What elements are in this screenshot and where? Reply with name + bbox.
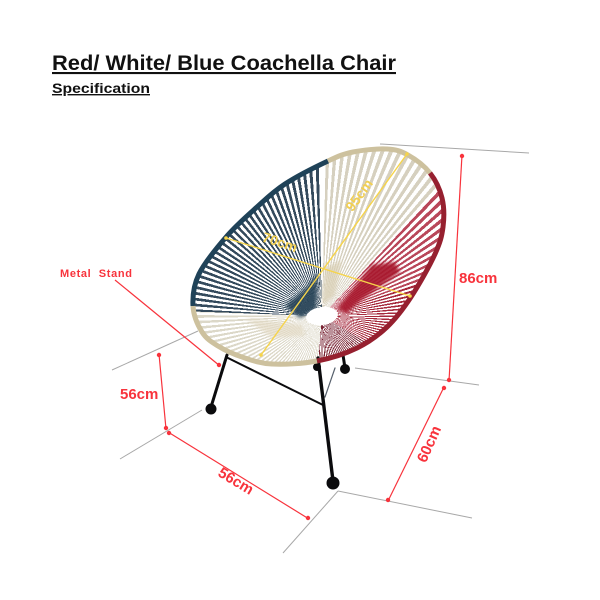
label: 60cm: 60cm bbox=[414, 423, 445, 465]
95cm height line bbox=[261, 154, 407, 355]
arrow: metal stand bbox=[115, 280, 221, 367]
arrow: 86cm bbox=[447, 154, 464, 382]
rim: navy section bbox=[193, 161, 328, 306]
arrow: 60cm bbox=[386, 386, 446, 502]
label: metal stand: Metal Stand bbox=[60, 268, 132, 280]
label: 86cm: 86cm bbox=[459, 270, 497, 287]
70cm label: 70cm bbox=[260, 229, 300, 255]
chair rim bbox=[193, 149, 444, 364]
dense string clusters around the hub bbox=[245, 260, 400, 338]
label: 56cm horizontal: 56cm bbox=[215, 464, 257, 499]
arrow: 56cm horizontal bbox=[167, 431, 310, 520]
yellow seat dimensions bbox=[224, 152, 412, 357]
subtitle: Specification bbox=[52, 80, 150, 96]
arrow: 56cm vertical bbox=[157, 353, 168, 430]
rim: top cream section bbox=[328, 149, 430, 173]
95cm label: 95cm bbox=[342, 176, 376, 214]
chair seat spokes bbox=[194, 151, 442, 362]
grey guide lines bbox=[112, 144, 529, 553]
70cm width line bbox=[226, 238, 410, 296]
title: Red/ White/ Blue Coachella Chair bbox=[52, 52, 396, 75]
red dimensions bbox=[115, 154, 464, 520]
rim: red section bbox=[317, 173, 444, 361]
rim: bottom cream section bbox=[193, 306, 317, 364]
chair legs bbox=[206, 355, 350, 489]
hub opening bbox=[305, 305, 339, 327]
label: 56cm vertical: 56cm bbox=[120, 386, 158, 403]
